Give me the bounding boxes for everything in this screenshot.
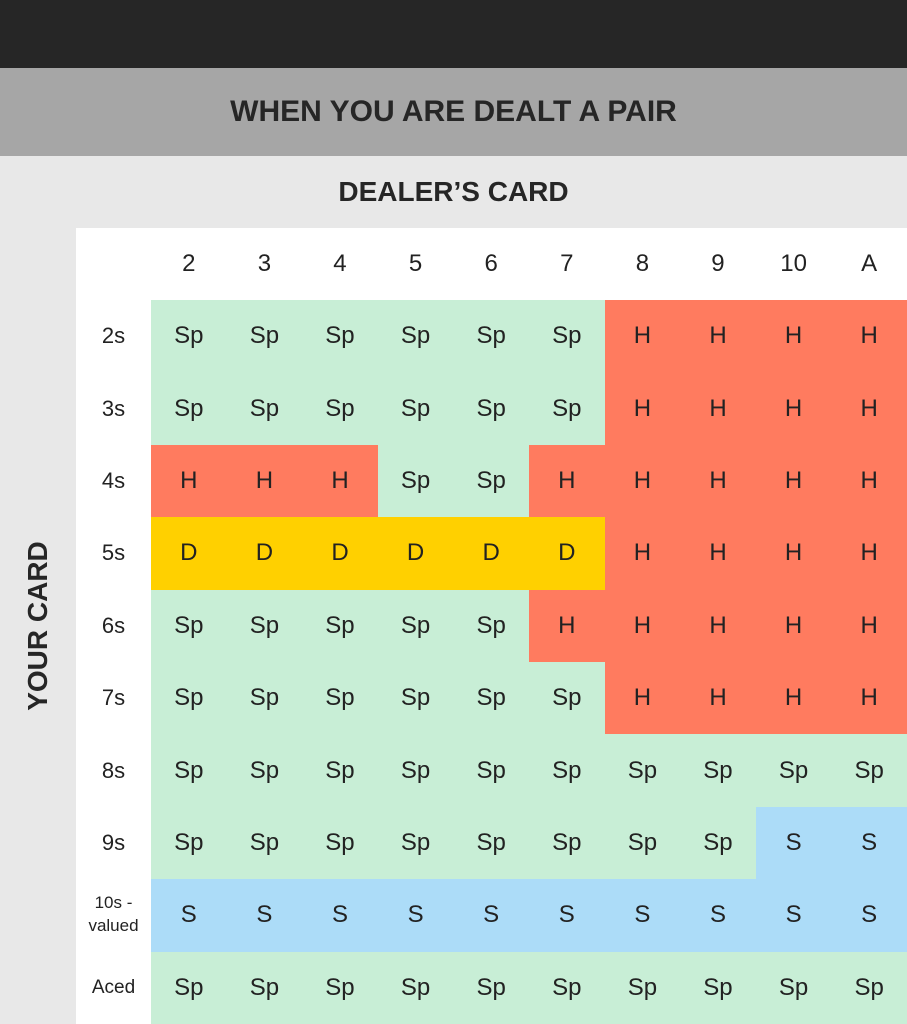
strategy grid: [151, 300, 907, 1024]
row labels: 2s: [102, 323, 125, 348]
strategy grid: Sp: [401, 829, 430, 856]
strategy grid: S: [634, 901, 650, 928]
strategy grid: Sp: [552, 974, 581, 1001]
row 8s: Sp: [174, 757, 203, 784]
strategy grid: S: [710, 901, 726, 928]
strategy grid: S: [332, 901, 348, 928]
strategy grid: D: [558, 539, 575, 566]
dealer card column headers: 6: [484, 250, 498, 277]
strategy grid: H: [861, 539, 878, 566]
strategy grid: S: [559, 901, 575, 928]
strategy grid: Sp: [250, 684, 279, 711]
row aced: [151, 952, 227, 1024]
dealer card column headers: 4: [333, 250, 347, 277]
row 6s: [151, 590, 227, 662]
title: WHEN YOU ARE DEALT A PAIR: [230, 95, 677, 128]
strategy grid: Sp: [401, 612, 430, 639]
strategy grid: Sp: [703, 974, 733, 1001]
strategy grid: H: [331, 467, 349, 494]
strategy grid: H: [634, 395, 651, 422]
strategy grid: Sp: [628, 829, 657, 856]
strategy grid: H: [709, 539, 727, 566]
row 3s: [151, 372, 227, 445]
strategy grid: Sp: [854, 974, 884, 1001]
strategy grid: Sp: [703, 829, 733, 856]
row labels: 5s: [102, 540, 125, 565]
strategy grid: H: [634, 539, 651, 566]
row 4s: [151, 445, 227, 517]
strategy grid: H: [634, 467, 651, 494]
row 10s: [151, 879, 227, 952]
row 7s: [151, 662, 227, 734]
row 6s: Sp: [174, 612, 203, 639]
strategy grid: Sp: [476, 467, 506, 494]
dealer card column headers: 3: [258, 250, 271, 277]
strategy grid: Sp: [250, 395, 279, 422]
strategy grid: S: [861, 829, 877, 856]
row labels: [88, 323, 139, 998]
strategy grid: Sp: [476, 322, 506, 349]
strategy grid: Sp: [325, 395, 355, 422]
strategy grid: Sp: [552, 757, 581, 784]
strategy grid: Sp: [401, 974, 430, 1001]
strategy grid: S: [256, 901, 272, 928]
heading: your card: [0, 228, 76, 1024]
strategy grid: Sp: [552, 684, 581, 711]
strategy grid: Sp: [325, 829, 355, 856]
strategy grid: H: [785, 467, 802, 494]
dealer card column headers: A: [861, 250, 877, 277]
strategy grid: Sp: [401, 322, 430, 349]
strategy grid: S: [786, 901, 802, 928]
strategy grid: Sp: [476, 757, 506, 784]
row labels: valued: [88, 916, 139, 935]
dealer card column headers: 9: [711, 250, 725, 277]
strategy grid: H: [709, 467, 727, 494]
strategy grid: Sp: [476, 612, 506, 639]
strategy grid: Sp: [325, 757, 355, 784]
strategy grid: Sp: [401, 395, 430, 422]
strategy grid: S: [861, 901, 877, 928]
strategy grid: Sp: [476, 829, 506, 856]
row 5s: [151, 517, 227, 590]
strategy grid: H: [861, 395, 878, 422]
row labels: 4s: [102, 468, 125, 493]
strategy grid: Sp: [703, 757, 733, 784]
strategy grid: Sp: [779, 757, 808, 784]
strategy grid: Sp: [250, 829, 279, 856]
strategy grid: S: [408, 901, 424, 928]
strategy grid: Sp: [552, 829, 581, 856]
row 2s: Sp: [174, 322, 203, 349]
row aced: Sp: [174, 974, 203, 1001]
title: [0, 68, 907, 156]
strategy grid: Sp: [854, 757, 884, 784]
strategy grid: H: [785, 322, 802, 349]
row labels: Aced: [92, 977, 135, 998]
strategy grid: S: [483, 901, 499, 928]
strategy grid: Sp: [325, 322, 355, 349]
row 9s: Sp: [174, 829, 203, 856]
row labels: 7s: [102, 685, 125, 710]
row labels: 6s: [102, 613, 125, 638]
dealer card column headers: 10: [780, 250, 807, 277]
strategy grid: H: [634, 612, 651, 639]
dealer card column headers: [182, 250, 877, 277]
strategy grid: H: [861, 322, 878, 349]
row 10s: S: [181, 901, 197, 928]
strategy grid: H: [785, 612, 802, 639]
strategy grid: D: [256, 539, 273, 566]
strategy grid: H: [709, 684, 727, 711]
strategy grid: Sp: [552, 395, 581, 422]
strategy grid: H: [709, 322, 727, 349]
strategy grid: H: [861, 612, 878, 639]
strategy grid: H: [558, 612, 575, 639]
strategy grid: H: [861, 467, 878, 494]
row labels: 9s: [102, 830, 125, 855]
strategy grid: Sp: [325, 974, 355, 1001]
dealer card column headers: 5: [409, 250, 422, 277]
row 8s: [151, 734, 227, 807]
strategy grid: D: [407, 539, 424, 566]
row labels: 3s: [102, 396, 125, 421]
strategy grid: D: [483, 539, 500, 566]
strategy grid: S: [786, 829, 802, 856]
dealer card column headers: 2: [182, 250, 195, 277]
strategy grid: H: [709, 395, 727, 422]
strategy grid: Sp: [250, 974, 279, 1001]
strategy grid: Sp: [401, 467, 430, 494]
strategy grid: Sp: [250, 612, 279, 639]
dealer card column headers: 8: [636, 250, 649, 277]
dealer card column headers: 7: [560, 250, 573, 277]
strategy grid: H: [634, 322, 651, 349]
strategy grid: H: [634, 684, 651, 711]
strategy grid: H: [709, 612, 727, 639]
strategy grid: Sp: [325, 684, 355, 711]
strategy grid: H: [785, 395, 802, 422]
strategy grid: Sp: [476, 684, 506, 711]
row labels: 10s -: [95, 893, 132, 912]
heading: dealer's card: DEALER’S CARD: [338, 176, 569, 207]
strategy grid: Sp: [628, 974, 657, 1001]
strategy grid: Sp: [552, 322, 581, 349]
row labels: 8s: [102, 758, 125, 783]
strategy grid: Sp: [401, 684, 430, 711]
strategy grid: Sp: [401, 757, 430, 784]
strategy grid: H: [558, 467, 575, 494]
strategy grid: Sp: [250, 322, 279, 349]
row 4s: H: [180, 467, 197, 494]
strategy grid: H: [785, 684, 802, 711]
heading: dealer's card: [0, 156, 907, 228]
row 9s: [151, 807, 227, 879]
row 5s: D: [180, 539, 197, 566]
strategy grid: Sp: [250, 757, 279, 784]
heading: your card: YOUR CARD: [22, 541, 53, 711]
strategy grid: H: [256, 467, 273, 494]
strategy grid: H: [861, 684, 878, 711]
strategy grid: Sp: [325, 612, 355, 639]
strategy grid: Sp: [779, 974, 808, 1001]
top dark bar: [0, 0, 907, 68]
strategy grid: H: [785, 539, 802, 566]
row 2s: [151, 300, 227, 372]
strategy grid: Sp: [628, 757, 657, 784]
row 3s: Sp: [174, 395, 203, 422]
strategy grid: Sp: [476, 974, 506, 1001]
row 7s: Sp: [174, 684, 203, 711]
strategy grid: Sp: [476, 395, 506, 422]
strategy grid: D: [331, 539, 349, 566]
